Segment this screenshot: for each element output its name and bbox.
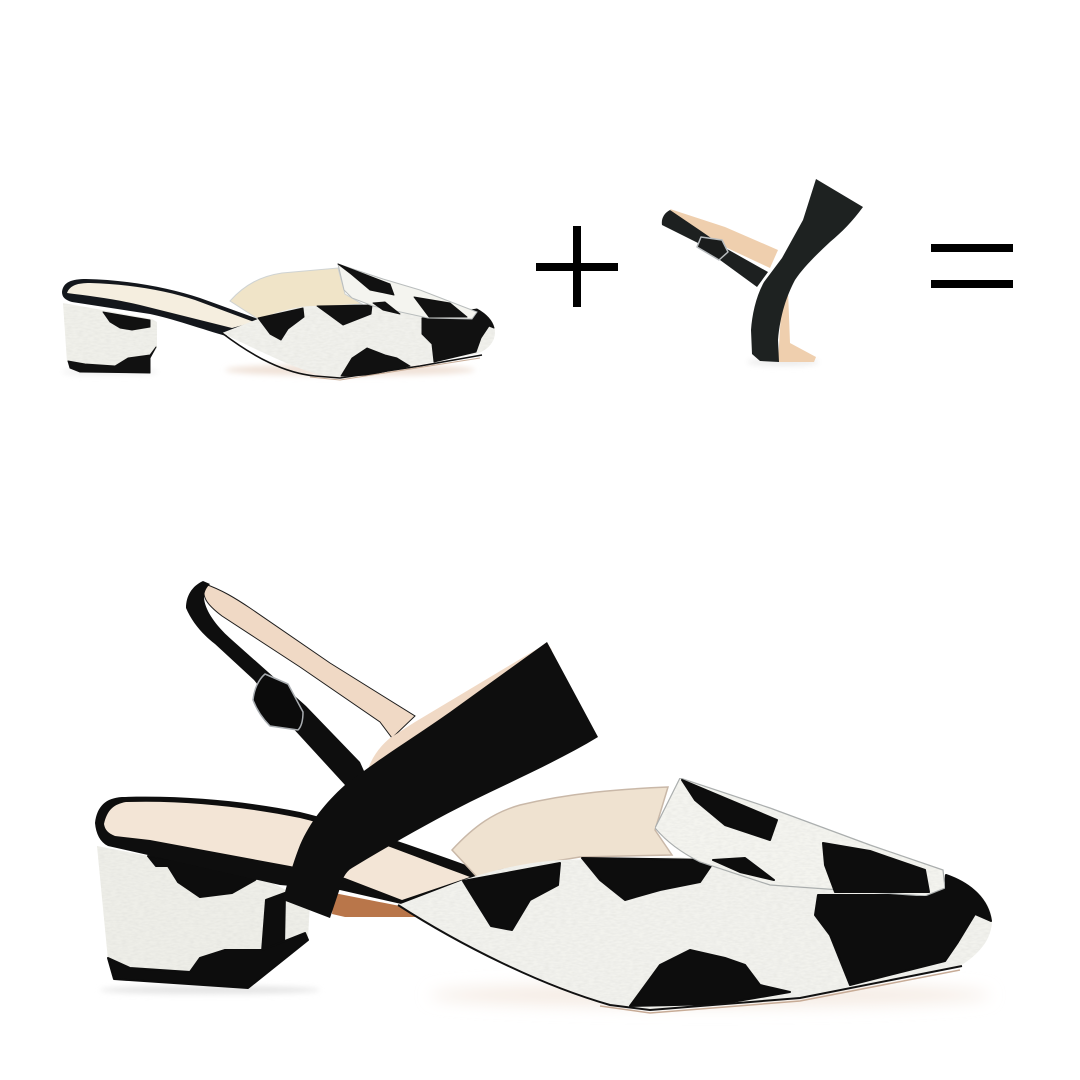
mule vamp	[222, 305, 495, 380]
strap lining: ankle strap	[670, 209, 778, 268]
thin strap with buckle	[662, 210, 768, 287]
wide strap band	[751, 179, 863, 362]
rear strap lining	[204, 584, 415, 738]
vamp	[398, 857, 992, 1013]
combined slingback shoe	[95, 581, 992, 1013]
wide front strap	[283, 642, 598, 918]
opening lining	[452, 787, 672, 878]
interchangeable strap	[662, 179, 863, 366]
mule insole and rim	[62, 279, 258, 336]
plus sign	[536, 226, 618, 307]
rear strap with buckle	[186, 581, 368, 793]
strap lining: foot tab	[778, 290, 816, 362]
front strap lining	[366, 643, 552, 776]
mule opening lining	[230, 268, 362, 319]
heel block	[97, 846, 310, 988]
equals sign	[931, 244, 1013, 288]
insole and rim	[95, 797, 488, 917]
loafer flap	[655, 778, 945, 896]
mule shoe: cow print	[62, 264, 495, 380]
mule heel block	[63, 303, 157, 373]
mule flap	[338, 264, 477, 319]
